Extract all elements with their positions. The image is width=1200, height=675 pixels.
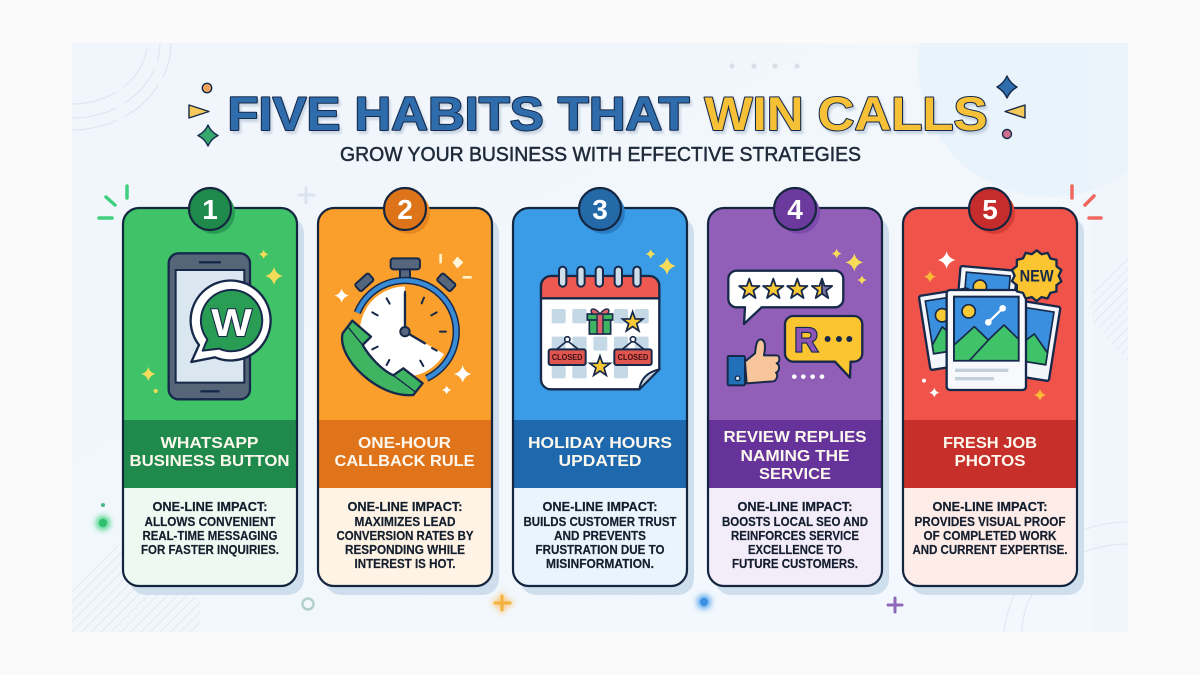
card 1 impact text (141, 499, 279, 557)
card 4 label (724, 429, 867, 483)
title decorations left (189, 83, 218, 146)
decorative green burst (99, 186, 127, 218)
card 5 impact text (912, 499, 1068, 557)
number badge 4 (774, 188, 820, 234)
card 1 label (130, 435, 290, 470)
card 2 label (334, 435, 475, 470)
card 2 label: CALLBACK RULE (334, 453, 475, 470)
number badge 5 (969, 188, 1015, 234)
icon: stopwatch with phone (335, 254, 472, 395)
card 3 label (528, 435, 672, 470)
panel: card 1 whatsapp (123, 188, 304, 595)
subtitle: GROW YOUR BUSINESS WITH EFFECTIVE STRATEGIES (340, 144, 861, 166)
card 3 impact text: MISINFORMATION. (546, 557, 654, 571)
card 1 label: BUSINESS BUTTON (130, 453, 290, 470)
card 5 impact text: PROVIDES VISUAL PROOF (914, 515, 1066, 529)
icon: calendar (541, 249, 676, 389)
icon: review bubbles and thumb (728, 249, 867, 385)
card 4 impact text: FUTURE CUSTOMERS. (732, 557, 858, 571)
number badge 3: 3 (592, 194, 608, 225)
card 3 impact text: AND PREVENTS (554, 529, 646, 543)
card 1 impact text: ONE-LINE IMPACT: (152, 499, 268, 514)
background panel (72, 43, 1128, 632)
icon: review bubbles and thumb: R (794, 322, 818, 360)
card 2 impact text: CONVERSION RATES BY (336, 529, 474, 543)
card 2 impact text: RESPONDING WHILE (345, 543, 465, 557)
card 1 impact text: REAL-TIME MESSAGING (142, 529, 278, 543)
card 4 impact text: ONE-LINE IMPACT: (738, 499, 852, 514)
card 2 impact text: MAXIMIZES LEAD (354, 515, 456, 529)
panel: card 5 job photos (903, 188, 1084, 595)
card 2 impact text (336, 499, 474, 571)
card 2 label: ONE-HOUR (358, 435, 451, 452)
card 3 impact text: ONE-LINE IMPACT: (542, 499, 658, 514)
icon: photo stack with new badge (919, 246, 1067, 401)
card 3 impact text: BUILDS CUSTOMER TRUST (524, 515, 677, 529)
card 5 label: PHOTOS (954, 453, 1026, 470)
card 4 impact text: EXCELLENCE TO (748, 543, 842, 557)
number badge 5: 5 (982, 194, 998, 225)
icon: calendar: CLOSED (552, 352, 582, 362)
panel: card 3 holiday hours (513, 188, 694, 595)
card 3 label: UPDATED (558, 453, 642, 470)
card 5 label: FRESH JOB (943, 435, 1037, 452)
number badge 4: 4 (787, 194, 803, 225)
card 5 impact text: AND CURRENT EXPERTISE. (912, 543, 1068, 557)
decorative dots and plus marks (96, 503, 902, 612)
number badge 2 (384, 188, 430, 234)
title: FIVE HABITS THAT (228, 87, 690, 140)
number badge 1 (189, 188, 235, 234)
card 5 impact text: ONE-LINE IMPACT: (932, 499, 1048, 514)
card 3 label: HOLIDAY HOURS (528, 435, 672, 452)
card 4 label: NAMING THE (740, 448, 850, 465)
card 1 label: WHATSAPP (160, 435, 259, 452)
title decorations right (997, 76, 1025, 138)
title (228, 87, 988, 140)
panel: card 2 callback (318, 188, 499, 595)
card 4 impact text: REINFORCES SERVICE (731, 529, 859, 543)
card 5 impact text: OF COMPLETED WORK (924, 529, 1056, 543)
card 1 impact text: FOR FASTER INQUIRIES. (141, 543, 279, 557)
card 4 label: REVIEW REPLIES (724, 429, 867, 446)
card 3 impact text (524, 499, 677, 571)
title: WIN CALLS (704, 87, 988, 140)
card 3 impact text: FRUSTRATION DUE TO (536, 543, 665, 557)
icon: phone with chat bubble: W (211, 302, 252, 345)
number badge 1: 1 (202, 194, 218, 225)
card 1 impact text: ALLOWS CONVENIENT (144, 515, 276, 529)
icon: calendar: CLOSED (618, 352, 648, 362)
decorative red burst (1072, 186, 1101, 218)
card 4 impact text (722, 499, 868, 571)
card 2 impact text: ONE-LINE IMPACT: (348, 499, 462, 514)
icon: phone with chat bubble (141, 250, 283, 399)
card 4 label: SERVICE (759, 466, 831, 483)
number badge 3 (579, 188, 625, 234)
card 4 impact text: BOOSTS LOCAL SEO AND (722, 515, 868, 529)
card 5 label (943, 435, 1037, 470)
number badge 2: 2 (397, 194, 413, 225)
card 2 impact text: INTEREST IS HOT. (354, 557, 456, 571)
icon: photo stack with new badge: NEW (1020, 267, 1054, 286)
panel: card 4 review replies (708, 188, 889, 595)
